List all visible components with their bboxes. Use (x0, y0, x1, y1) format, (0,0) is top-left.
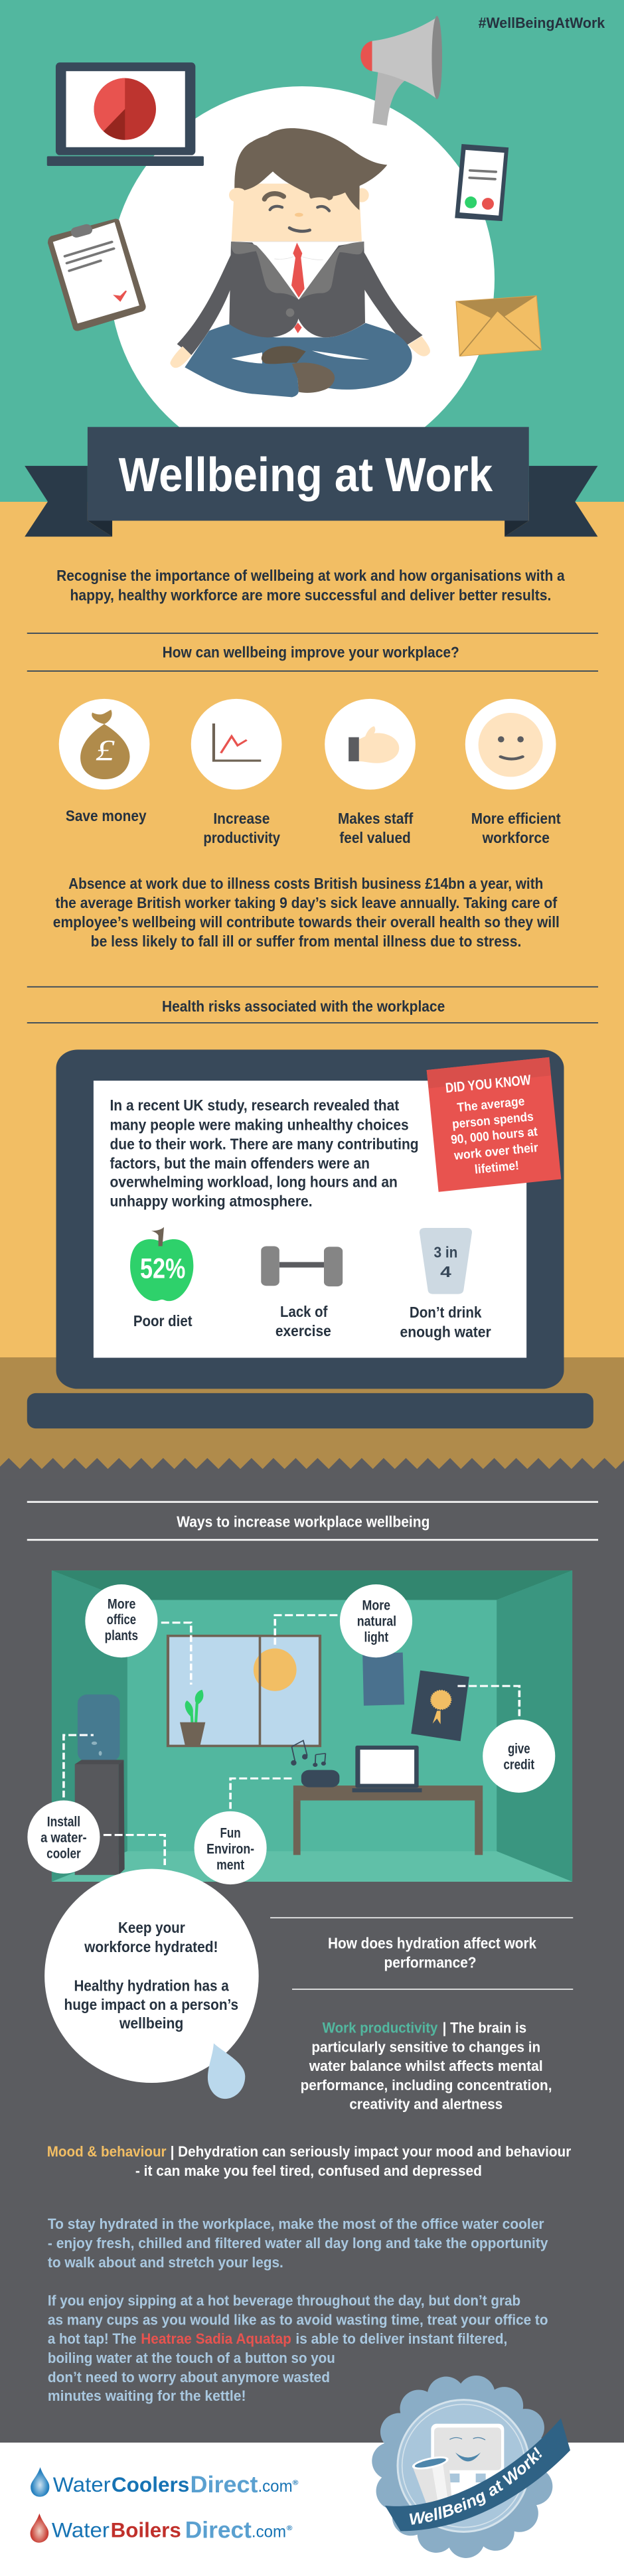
heading: how can wellbeing improve: How can wellbeing improve your workplace? (163, 644, 459, 661)
callout: more office plants: plants (105, 1628, 138, 1643)
label: lack of exercise (275, 1303, 331, 1339)
icon: laptop with pie chart (47, 62, 204, 166)
callout: give credit (483, 1720, 555, 1793)
big speech circle: Keep your (118, 1920, 185, 1937)
icon: money bag: £ (96, 734, 115, 767)
hot tap text: a hot tap! The (48, 2331, 137, 2348)
icon: money bag (59, 699, 149, 790)
study text: many people were making unhealthy choices (110, 1116, 409, 1134)
callout: fun environment (195, 1811, 267, 1884)
work productivity text: particularly sensitive to changes in (311, 2039, 540, 2056)
study text: unhappy working atmosphere. (110, 1193, 313, 1210)
did you know text: DID YOU KNOW (445, 1073, 532, 1096)
did you know text: lifetime! (474, 1159, 520, 1177)
did you know text: The average (457, 1095, 525, 1115)
logo: WaterCoolersDirect: Water (53, 2473, 111, 2496)
logo: WaterCoolersDirect: ® (293, 2479, 299, 2486)
logo: WaterCoolersDirect: .com (258, 2476, 293, 2495)
label: makes staff feel valued: Makes staff (338, 810, 413, 827)
callout: more office plants: office (107, 1612, 136, 1628)
floor zigzag (0, 1458, 624, 1479)
callout: more office plants: More (108, 1596, 135, 1612)
hot tap text: If you enjoy sipping at a hot beverage throughout the day, but don’t grab (48, 2293, 520, 2309)
absence paragraph (53, 875, 560, 950)
icon: water drop (208, 2043, 245, 2099)
label: don't drink enough water: Don’t drink (410, 1304, 482, 1321)
heading: hydration: performance? (384, 1954, 477, 1971)
did you know text: 90, 000 hours at (450, 1125, 538, 1147)
work productivity text: Work productivity (323, 2020, 438, 2036)
stay hydrated text: to walk about and stretch your legs. (48, 2255, 283, 2271)
logo: WaterBoilersDirect: Direct (185, 2517, 252, 2543)
hot tap text: don’t need to worry about anymore wasted (48, 2369, 330, 2386)
section: ways to increase wellbeing (27, 1501, 598, 2083)
did you know text: work over their (453, 1141, 539, 1163)
study text: due to their work. There are many contributing (110, 1136, 419, 1153)
callout: fun environment: Environ- (206, 1841, 254, 1856)
did you know text: person spends (451, 1110, 534, 1132)
icon: smiley face (465, 699, 556, 790)
hashtag: #WellBeingAtWork (479, 15, 605, 31)
work productivity text (301, 2020, 552, 2113)
radio with music notes (291, 1740, 339, 1787)
badge: wellbeing at work (372, 2376, 570, 2558)
heading: hydration: How does hydration affect work (328, 1935, 536, 1952)
icon: envelope (456, 296, 541, 356)
callout: more natural light: light (364, 1629, 388, 1645)
work productivity text: performance, including concentration, (301, 2077, 552, 2094)
label: makes staff feel valued: feel valued (339, 829, 411, 846)
label: don't drink enough water: enough water (400, 1324, 491, 1341)
big speech circle: workforce hydrated! (84, 1939, 218, 1956)
hot tap text: is able to deliver instant filtered, (295, 2331, 507, 2348)
mood and behaviour text (47, 2143, 572, 2179)
callout: install a water-cooler: cooler (46, 1845, 81, 1861)
icon: thumbs up (325, 699, 416, 790)
label: increase productivity: Increase (213, 810, 270, 827)
callout: fun environment: ment (216, 1856, 244, 1872)
icon: dumbbell (261, 1247, 343, 1286)
label: increase productivity (203, 810, 280, 846)
callout: give credit: credit (503, 1756, 534, 1772)
work productivity text: creativity and alertness (349, 2096, 503, 2113)
intro text (56, 567, 566, 604)
heading: ways to increase: Ways to increase workplace wellbeing (177, 1513, 429, 1531)
label: lack of exercise: exercise (275, 1322, 331, 1339)
icon: megaphone (360, 16, 442, 125)
laptop frame (27, 1049, 593, 1428)
hot tap text: Heatrae Sadia Aquatap (141, 2331, 291, 2348)
hot tap text: boiling water at the touch of a button so you (48, 2350, 335, 2367)
study text: In a recent UK study, research revealed that (110, 1097, 399, 1114)
label: increase productivity: productivity (203, 829, 280, 846)
big speech circle (44, 1869, 259, 2083)
section: how can wellbeing improve (27, 567, 598, 1023)
logo: WaterCoolersDirect (31, 2467, 299, 2498)
work productivity text: water balance whilst affects mental (309, 2058, 543, 2075)
window with sun (168, 1636, 320, 1746)
label: makes staff feel valued (338, 810, 413, 846)
note: did you know background (427, 1057, 561, 1192)
heading: health risks: Health risks associated with the workplace (162, 998, 445, 1015)
label: don't drink enough water (400, 1304, 491, 1341)
dashed connectors (64, 1615, 519, 1865)
label: more efficient workforce: workforce (482, 829, 550, 846)
label: more efficient workforce: More efficient (471, 810, 561, 827)
label: poor diet: Poor diet (133, 1312, 193, 1329)
callout: install a water-cooler: a water- (40, 1829, 87, 1845)
stay hydrated text (48, 2216, 548, 2271)
section: lower text and logos (31, 2020, 572, 2543)
big speech circle: huge impact on a person’s (64, 1997, 238, 2013)
office room (52, 1570, 572, 1882)
icon: apple 52% (130, 1227, 193, 1301)
label: more efficient workforce (471, 810, 561, 846)
badge: wellbeing at work: WellBeing at Work! (409, 2447, 542, 2525)
plant (180, 1690, 205, 1745)
icon: apple 52%: 52% (140, 1254, 185, 1284)
mood and behaviour text: - it can make you feel tired, confused and depressed (135, 2162, 482, 2179)
callout: more office plants (85, 1584, 157, 1657)
heading: hydration (270, 1918, 573, 1990)
logo: WaterBoilersDirect (31, 2514, 293, 2543)
hero section (25, 15, 605, 537)
callout: give credit: give (508, 1740, 530, 1756)
callout: install a water-cooler (27, 1801, 100, 1874)
logo: WaterBoilersDirect: .com (252, 2522, 286, 2541)
icon: clipboard (48, 218, 146, 331)
study text (110, 1097, 419, 1210)
certificate (411, 1671, 469, 1741)
logo: WaterBoilersDirect: Boilers (111, 2518, 181, 2542)
work productivity text: | The brain is (443, 2020, 526, 2036)
icon: glass 3 in 4: 4 (440, 1263, 451, 1280)
poster (362, 1653, 404, 1706)
logo: WaterCoolersDirect: Direct (191, 2471, 258, 2498)
callout: more natural light (340, 1584, 412, 1657)
label: lack of exercise: Lack of (280, 1303, 327, 1320)
character: meditating businessman (170, 128, 430, 397)
laptop on desk (352, 1746, 422, 1792)
banner tails (25, 466, 597, 537)
section: health risks laptop (0, 1049, 624, 1479)
callout: install a water-cooler: Install (47, 1813, 80, 1829)
desk (293, 1785, 483, 1855)
banner (88, 427, 529, 520)
icon: line chart (191, 699, 281, 790)
logo: WaterCoolersDirect: Coolers (112, 2473, 189, 2496)
big speech circle: wellbeing (119, 2015, 183, 2032)
callout: more natural light: More (362, 1597, 390, 1613)
mood and behaviour text: Mood & behaviour (47, 2143, 167, 2160)
icon: phone (455, 144, 508, 221)
study text: overwhelming workload, long hours and an (110, 1174, 398, 1191)
callout: more natural light: natural (357, 1613, 396, 1629)
big speech circle: Healthy hydration has a (74, 1977, 230, 1995)
water cooler (75, 1695, 125, 1875)
icon: glass 3 in 4: 3 in (433, 1244, 457, 1261)
hero white circle (110, 86, 495, 471)
title: Wellbeing at Work (119, 449, 493, 502)
hot tap text: minutes waiting for the kettle! (48, 2388, 246, 2405)
logo: WaterBoilersDirect: ® (287, 2525, 293, 2532)
did you know text (445, 1073, 539, 1177)
icon: glass 3 in 4 (420, 1228, 472, 1294)
hot tap text (48, 2293, 548, 2405)
study text: factors, but the main offenders were an (110, 1155, 370, 1172)
callout: fun environment: Fun (220, 1825, 241, 1841)
logo: WaterBoilersDirect: Water (52, 2518, 110, 2542)
label: save money: Save money (66, 807, 147, 824)
